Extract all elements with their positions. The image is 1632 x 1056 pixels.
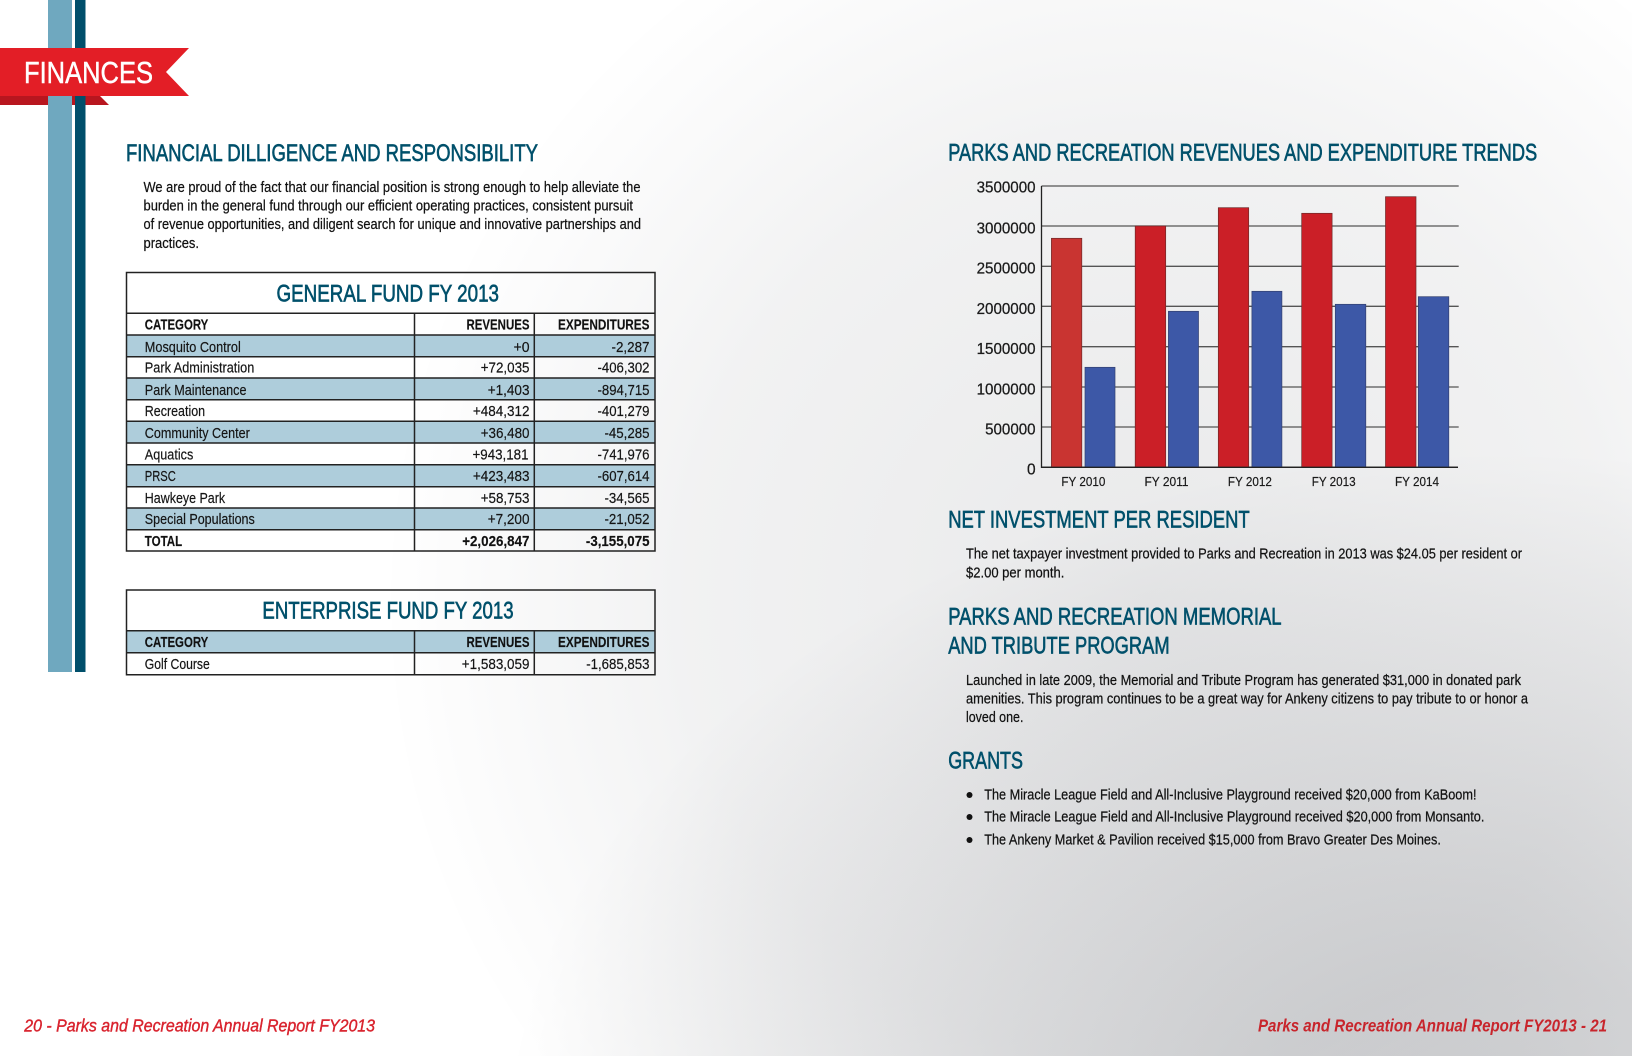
- row: mosquito control: Mosquito Control: [145, 340, 241, 356]
- y axis labels: 2500000: [977, 261, 1036, 278]
- row: mosquito control: -2,287: [612, 340, 650, 356]
- row: mosquito control: [145, 340, 650, 356]
- bar chart: revenues and expenditures: [977, 179, 1459, 489]
- y axis labels: 1000000: [977, 381, 1036, 398]
- row: recreation: +484,312: [473, 404, 530, 420]
- footer left: 20 - Parks and Recreation Annual Report FY2013: [23, 1016, 375, 1036]
- heading: grants: GRANTS: [948, 748, 1023, 775]
- row: park maintenance: +1,403: [488, 383, 530, 399]
- row: prsc: -607,614: [598, 469, 650, 485]
- row: hawkeye park: [145, 491, 650, 507]
- memorial text: amenities. This program continues to be a great way for Ankeny citizens to pay tribute to or honor a: [966, 691, 1529, 707]
- y axis labels: 1500000: [977, 341, 1036, 358]
- row: prsc: +423,483: [473, 469, 530, 485]
- heading: memorial and tribute: [948, 603, 1282, 660]
- y axis labels: 2000000: [977, 301, 1036, 318]
- grants list: The Miracle League Field and All-Inclusive Playground received $20,000 from KaBoom!: [984, 788, 1476, 804]
- table: general fund: [126, 272, 655, 551]
- header row: CATEGORY: [145, 317, 209, 333]
- row: community center: [145, 426, 650, 442]
- row: total: [145, 534, 650, 550]
- intro paragraph: of revenue opportunities, and diligent search for unique and innovative partnerships and: [144, 217, 641, 233]
- row: hawkeye park: +58,753: [481, 491, 530, 507]
- net investment text: $2.00 per month.: [966, 566, 1064, 582]
- row: aquatics: +943,181: [472, 448, 528, 464]
- row: recreation: Recreation: [145, 404, 205, 420]
- intro paragraph: practices.: [144, 236, 199, 252]
- bars FY 2012: [1218, 208, 1282, 467]
- row: aquatics: [145, 448, 650, 464]
- y axis labels: 0: [1027, 461, 1036, 478]
- row: aquatics: -741,976: [598, 448, 650, 464]
- table: enterprise fund: [126, 590, 655, 675]
- grants list: [966, 788, 1484, 849]
- row: park administration: -406,302: [598, 361, 650, 377]
- heading: memorial and tribute: AND TRIBUTE PROGRAM: [948, 633, 1170, 660]
- row: prsc: [145, 469, 650, 485]
- title ribbon: FINANCES: [0, 48, 189, 96]
- header row: REVENUES: [466, 317, 530, 333]
- vertical stripes: [48, 0, 86, 672]
- net investment text: [966, 547, 1522, 582]
- header row: [145, 635, 650, 651]
- heading: net investment: NET INVESTMENT PER RESIDENT: [948, 507, 1250, 534]
- heading: memorial and tribute: PARKS AND RECREATION MEMORIAL: [948, 603, 1282, 630]
- row: park administration: +72,035: [481, 361, 530, 377]
- ribbon shadow: [0, 96, 109, 105]
- table title: ENTERPRISE FUND FY 2013: [262, 598, 514, 624]
- x axis labels: FY 2012: [1228, 475, 1272, 489]
- row: special populations: [145, 512, 650, 528]
- header row: CATEGORY: [145, 635, 209, 651]
- row: special populations: +7,200: [488, 512, 530, 528]
- x axis labels: FY 2014: [1395, 475, 1439, 489]
- row: mosquito control: +0: [514, 340, 530, 356]
- row: total: TOTAL: [145, 534, 182, 550]
- row: total: +2,026,847: [462, 534, 530, 550]
- y axis labels: 500000: [985, 421, 1036, 438]
- memorial text: Launched in late 2009, the Memorial and Tribute Program has generated $31,000 in donated park: [966, 673, 1522, 689]
- x axis labels: FY 2011: [1144, 475, 1189, 489]
- grants list: The Miracle League Field and All-Inclusive Playground received $20,000 from Monsanto.: [984, 810, 1484, 826]
- row: community center: Community Center: [145, 426, 250, 442]
- row: hawkeye park: -34,565: [604, 491, 650, 507]
- memorial text: loved one.: [966, 710, 1023, 726]
- bars FY 2014: [1386, 197, 1449, 467]
- intro paragraph: burden in the general fund through our efficient operating practices, consistent pursuit: [144, 198, 633, 214]
- row: recreation: -401,279: [598, 404, 650, 420]
- row: recreation: [145, 404, 650, 420]
- table title: GENERAL FUND FY 2013: [276, 280, 499, 308]
- intro paragraph: [144, 180, 641, 252]
- row: golf course: [145, 657, 650, 673]
- row: total: -3,155,075: [586, 534, 650, 550]
- row: golf course: +1,583,059: [462, 657, 530, 673]
- row: community center: -45,285: [604, 426, 650, 442]
- row: special populations: -21,052: [604, 512, 650, 528]
- intro paragraph: We are proud of the fact that our financial position is strong enough to help alleviate the: [144, 180, 640, 196]
- header row: REVENUES: [466, 635, 530, 651]
- bars FY 2011: [1135, 226, 1198, 467]
- y axis labels: 3000000: [977, 220, 1036, 237]
- row: golf course: -1,685,853: [586, 657, 650, 673]
- grants list: The Ankeny Market & Pavilion received $15,000 from Bravo Greater Des Moines.: [984, 833, 1441, 849]
- y axis labels: [977, 179, 1036, 478]
- memorial text: [966, 673, 1529, 726]
- title ribbon: FINANCES: FINANCES: [24, 55, 153, 90]
- x axis labels: [1061, 475, 1439, 489]
- row: golf course: Golf Course: [145, 657, 210, 673]
- row: park maintenance: -894,715: [598, 383, 650, 399]
- net investment text: The net taxpayer investment provided to Parks and Recreation in 2013 was $24.05 per resident or: [966, 547, 1522, 563]
- row: park maintenance: [145, 383, 650, 399]
- row: park administration: [145, 361, 650, 377]
- row: hawkeye park: Hawkeye Park: [145, 491, 226, 507]
- row: park maintenance: Park Maintenance: [145, 383, 246, 399]
- bars FY 2013: [1302, 213, 1366, 467]
- header row: EXPENDITURES: [558, 635, 650, 651]
- y axis labels: 3500000: [977, 179, 1036, 196]
- row: prsc: PRSC: [145, 469, 176, 485]
- row: special populations: Special Populations: [145, 512, 255, 528]
- header row: [145, 317, 650, 333]
- x axis labels: FY 2010: [1061, 475, 1105, 489]
- heading: financial dilligence: FINANCIAL DILLIGENCE AND RESPONSIBILITY: [126, 140, 538, 167]
- row: park administration: Park Administration: [145, 361, 254, 377]
- row: community center: +36,480: [481, 426, 530, 442]
- row: aquatics: Aquatics: [145, 448, 193, 464]
- x axis labels: FY 2013: [1312, 475, 1356, 489]
- bars FY 2010: [1051, 238, 1115, 467]
- header row: EXPENDITURES: [558, 317, 650, 333]
